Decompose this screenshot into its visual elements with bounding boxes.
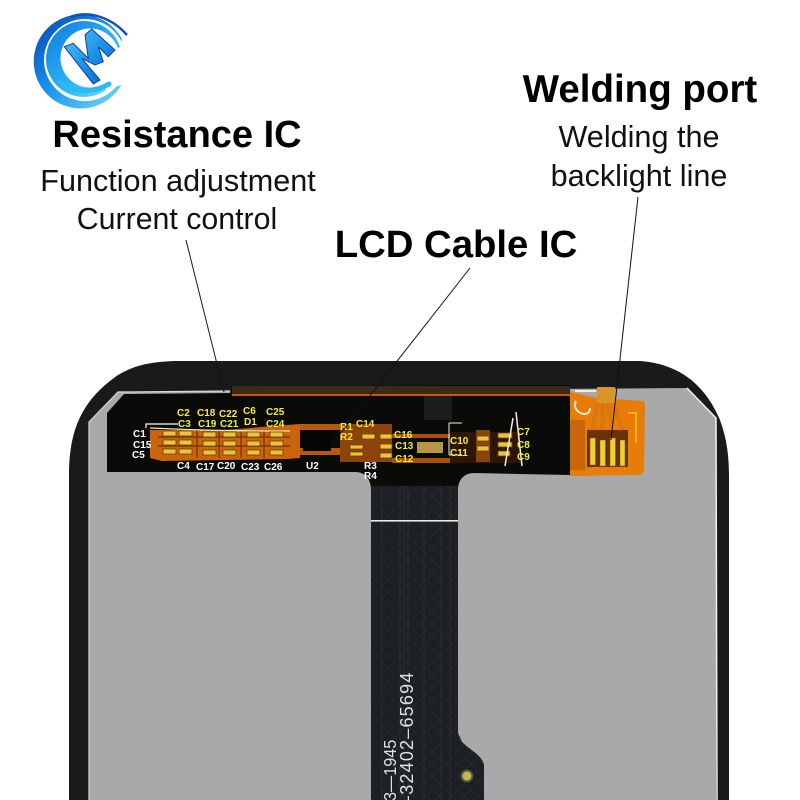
component labels white: C26 xyxy=(264,462,283,473)
component labels yellow: C19 xyxy=(198,419,217,430)
text: backlight line: backlight line xyxy=(551,159,727,193)
component labels yellow: C22 xyxy=(219,409,238,420)
heading: LCD Cable IC: LCD Cable IC xyxy=(335,223,577,266)
welding port xyxy=(570,387,645,476)
PCB right xyxy=(394,412,530,466)
PCB right: C12 xyxy=(395,454,414,465)
bezel xyxy=(69,361,729,800)
component labels white: C20 xyxy=(217,461,236,472)
icon: mounting hole xyxy=(460,770,474,782)
component labels yellow: C2 xyxy=(177,408,190,419)
component labels yellow: D1 xyxy=(244,417,257,428)
component labels white: U2 xyxy=(306,461,319,472)
component labels white: C15 xyxy=(133,440,152,451)
text: Welding the: Welding the xyxy=(558,120,720,154)
arrow: LCD Cable IC leader xyxy=(333,268,470,443)
component labels white: C1 xyxy=(133,429,146,440)
component labels white: R4 xyxy=(364,471,377,482)
component labels yellow: C3 xyxy=(178,419,191,430)
logo xyxy=(34,14,132,109)
arrow: Resistance IC leader xyxy=(186,240,224,392)
component labels yellow xyxy=(177,406,375,443)
PCB right: C7 xyxy=(517,427,530,438)
PCB right: C16 xyxy=(394,430,413,441)
component labels yellow: C25 xyxy=(266,407,285,418)
PCB right: C10 xyxy=(450,436,469,447)
component labels white xyxy=(132,429,377,482)
component labels white: C5 xyxy=(132,450,145,461)
arrow: Welding port leader xyxy=(611,197,638,440)
PCB right: C11 xyxy=(450,448,468,459)
component labels yellow: R2 xyxy=(340,432,353,443)
PCB right: C13 xyxy=(395,441,414,452)
PCB left xyxy=(132,406,470,482)
heading: Welding port: Welding port xyxy=(523,68,757,111)
component labels white: C23 xyxy=(241,462,260,473)
LCD screen module xyxy=(69,361,729,800)
PCB right: C8 xyxy=(517,440,530,451)
icon: M letter xyxy=(64,29,115,84)
component labels white: R3 xyxy=(364,461,377,472)
text: part number 2: 3—1945 xyxy=(380,740,400,800)
top bronze strip xyxy=(232,386,570,394)
component labels yellow: C24 xyxy=(266,419,285,430)
component labels yellow: R1 xyxy=(340,422,353,433)
heading: Resistance IC: Resistance IC xyxy=(52,114,302,156)
component labels yellow: C21 xyxy=(220,419,239,430)
component labels yellow: C6 xyxy=(243,406,256,417)
flex cable xyxy=(371,486,484,800)
capacitor pads xyxy=(163,431,392,458)
component labels white: C4 xyxy=(177,461,190,472)
PCB right: C9 xyxy=(517,452,530,463)
component labels yellow: C18 xyxy=(197,408,216,419)
text: Current control: Current control xyxy=(77,203,277,236)
black cable area xyxy=(107,385,570,520)
text: Function adjustment: Function adjustment xyxy=(40,164,316,198)
component labels yellow: C14 xyxy=(356,419,375,430)
grey display area xyxy=(89,388,716,800)
component labels white: C17 xyxy=(196,462,215,473)
